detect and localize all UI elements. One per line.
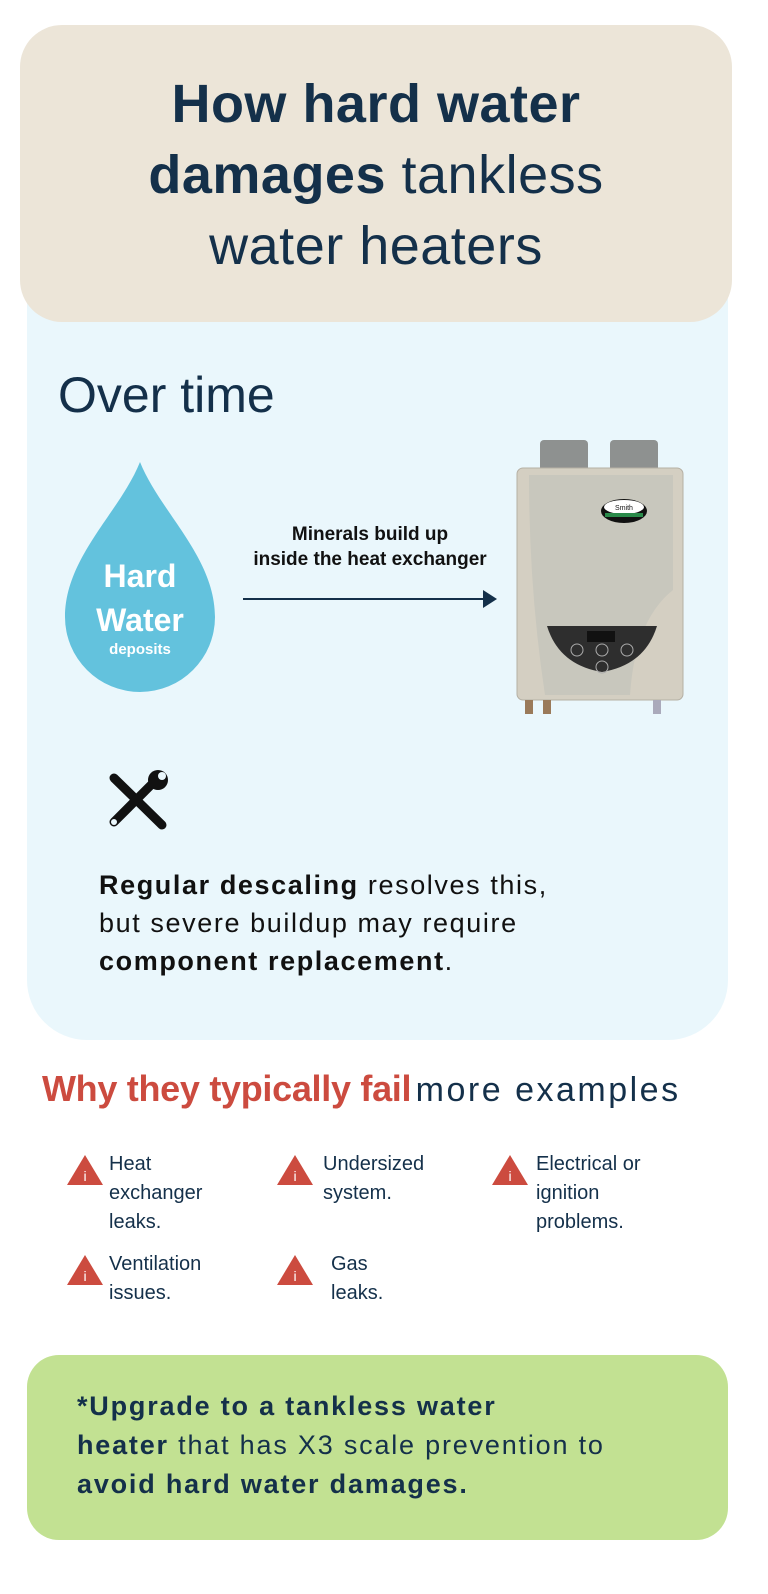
item: undersized: system. [323,1182,392,1204]
item: undersized: i [293,1168,297,1184]
icon: water drop [65,462,215,692]
text: descaling: Regular descaling resolves this, [99,870,548,900]
callout: upgrade: *Upgrade to a tankless water [77,1391,497,1421]
arrow label: inside the heat exchanger [253,549,487,570]
text: descaling: component replacement. [99,946,454,976]
item: heat exchanger: exchanger [109,1182,202,1204]
callout: upgrade: avoid hard water damages. [77,1469,469,1499]
arrow label: Minerals build up [292,524,448,545]
list: failure reasons [67,1153,640,1304]
item: electrical: Electrical or [536,1153,640,1175]
item: heat exchanger: i [83,1168,87,1184]
item: undersized: Undersized [323,1153,424,1175]
item: gas leaks: i [293,1268,297,1284]
item: gas leaks: Gas [331,1253,368,1275]
item: gas leaks [277,1253,383,1304]
text: descaling [99,870,548,976]
arrow label [253,524,487,570]
arrow [243,590,497,608]
title box [20,25,732,322]
item: electrical: i [508,1168,512,1184]
item: undersized [277,1153,424,1204]
drop text [96,558,184,658]
callout: upgrade [27,1355,728,1540]
item: electrical: ignition [536,1182,599,1204]
item: ventilation: Ventilation [109,1253,201,1275]
drop text: Hard [104,558,176,594]
item: electrical: problems. [536,1211,624,1233]
item: ventilation: i [83,1268,87,1284]
item: heat exchanger [67,1153,202,1233]
drop text: Water [96,602,184,638]
title [148,74,604,276]
title: damages tankless [148,145,604,205]
title: How hard water [171,74,581,134]
item: gas leaks: leaks. [331,1282,383,1304]
heading: over time: Over time [58,367,275,423]
item: electrical [492,1153,640,1233]
item: heat exchanger: leaks. [109,1211,161,1233]
item: ventilation: issues. [109,1282,171,1304]
item: ventilation [67,1253,201,1304]
title: water heaters [209,216,543,276]
icon: water heater: Smith [615,505,633,512]
drop text: deposits [109,641,171,658]
text: descaling: but severe buildup may require [99,908,518,938]
heading: why they fail: Why they typically fail more examples [42,1068,681,1109]
panel: over time [27,240,728,1040]
item: heat exchanger: Heat [109,1153,151,1175]
callout: upgrade: heater that has X3 scale prevention to [77,1430,605,1460]
icon: tools [110,770,168,830]
icon: water heater [516,440,684,714]
